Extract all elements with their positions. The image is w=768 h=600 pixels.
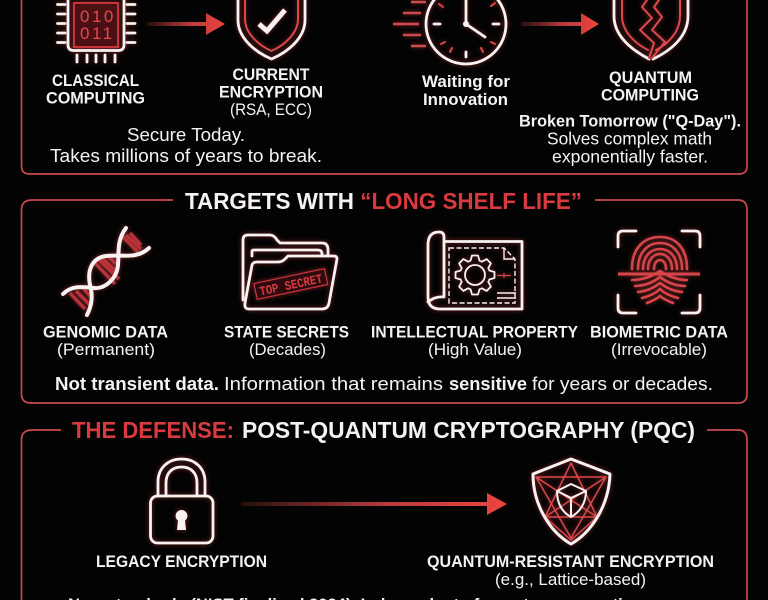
label: waiting for innovation: Waiting for — [422, 72, 510, 91]
icon: classical computer chip: 011 — [80, 24, 115, 43]
label: genomic data: (Permanent) — [57, 341, 155, 359]
label: intellectual property — [371, 324, 578, 359]
icon: classical computer chip: 010 — [80, 7, 116, 26]
arrow: classical to current encryption — [147, 13, 225, 35]
label: current encryption: (RSA, ECC) — [230, 101, 312, 119]
label: quantum-resistant encryption — [427, 553, 714, 589]
label: biometric data: BIOMETRIC DATA — [590, 324, 728, 342]
panel border — [22, 0, 747, 174]
heading: post-quantum cryptography: THE DEFENSE: — [72, 417, 234, 443]
label: current encryption: ENCRYPTION — [219, 84, 323, 102]
label: biometric data: (Irrevocable) — [611, 341, 707, 359]
icon: broken shield — [614, 0, 688, 59]
label: quantum-resistant encryption: QUANTUM-RESISTANT ENCRYPTION — [427, 553, 714, 571]
arrow: waiting to quantum computing — [521, 13, 599, 35]
label: intellectual property: (High Value) — [428, 341, 522, 359]
label: classical computing: COMPUTING — [46, 90, 145, 108]
label: legacy encryption: LEGACY ENCRYPTION — [96, 553, 267, 571]
icon: top secret folder — [243, 235, 337, 309]
label: classical computing: CLASSICAL — [52, 72, 139, 90]
icon: fingerprint scan — [618, 231, 700, 313]
arrow: legacy to quantum-resistant — [241, 493, 507, 515]
icon: classical computer chip — [58, 0, 135, 62]
label: waiting for innovation: Innovation — [423, 90, 508, 109]
text: not transient data: sensitive — [449, 373, 527, 394]
label: genomic data: GENOMIC DATA — [43, 324, 168, 342]
text: broken tomorrow: Solves complex math — [547, 128, 712, 148]
icon: blueprint with gear — [428, 232, 522, 309]
icon: dna helix — [63, 228, 149, 315]
label: classical computing — [46, 72, 145, 108]
label: state secrets: (Decades) — [249, 341, 326, 359]
text: broken tomorrow: exponentially faster. — [552, 146, 708, 166]
icon: top secret folder: TOP SECRET — [258, 271, 324, 299]
icon: clock with speed lines — [393, 0, 506, 64]
icon: lattice shield — [533, 459, 610, 544]
label: quantum computing: QUANTUM — [609, 69, 692, 87]
label: current encryption: CURRENT — [232, 66, 310, 84]
text: secure today: Secure Today. — [127, 124, 245, 145]
label: biometric data — [590, 324, 728, 359]
label: quantum computing: COMPUTING — [601, 86, 699, 104]
panel border — [22, 200, 747, 403]
icon: padlock — [150, 459, 213, 543]
label: intellectual property: INTELLECTUAL PROPERTY — [371, 324, 578, 342]
text: secure today: Takes millions of years to break. — [50, 145, 322, 166]
icon: shield with check — [238, 0, 305, 59]
label: waiting for innovation — [422, 72, 510, 109]
text: broken tomorrow: Broken Tomorrow ("Q-Day"). — [519, 112, 741, 130]
label: quantum computing — [601, 69, 699, 104]
panel: targets with long shelf life — [22, 188, 747, 403]
text: not transient data: Not transient data. — [55, 373, 219, 394]
text: not transient data — [55, 373, 713, 394]
panel border — [22, 430, 747, 600]
heading: targets: TARGETS WITH “LONG SHELF LIFE” — [185, 188, 582, 214]
text: broken tomorrow — [519, 112, 741, 166]
heading: post-quantum cryptography: POST-QUANTUM CRYPTOGRAPHY (PQC) — [242, 417, 695, 443]
label: current encryption — [219, 66, 323, 119]
text: not transient data: Information that remains — [224, 373, 443, 394]
text: secure today — [50, 124, 322, 166]
panel: the defense — [22, 417, 747, 600]
label: genomic data — [43, 324, 168, 359]
label: state secrets — [224, 324, 349, 359]
panel: classical vs quantum timeline — [22, 0, 747, 174]
label: state secrets: STATE SECRETS — [224, 324, 349, 342]
label: quantum-resistant encryption: (e.g., Lattice-based) — [495, 571, 646, 589]
text: not transient data: for years or decades. — [532, 373, 713, 394]
